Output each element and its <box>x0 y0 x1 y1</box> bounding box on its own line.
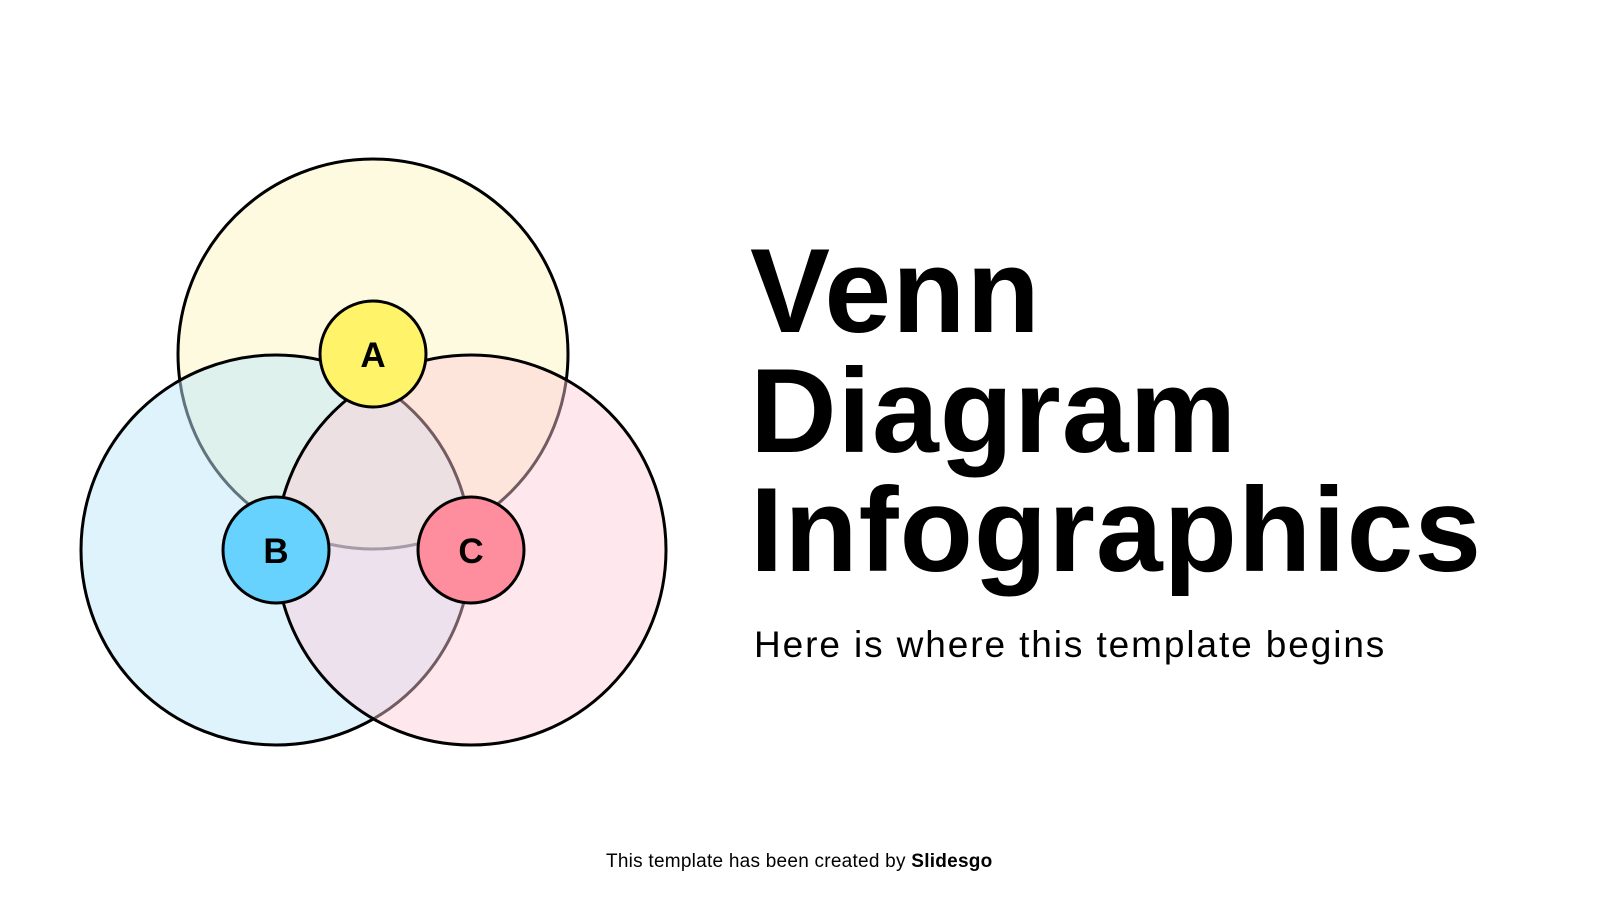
title: Venn <box>750 224 1041 358</box>
label C <box>418 497 524 603</box>
title <box>750 224 1482 597</box>
title: Diagram <box>750 344 1237 478</box>
label A <box>320 301 426 407</box>
label B <box>223 497 329 603</box>
title: Infographics <box>750 463 1482 597</box>
footer credit: This template has been created by Slidesgo <box>606 851 992 872</box>
circle C <box>276 355 666 745</box>
label B: B <box>263 532 289 571</box>
label C: C <box>458 532 484 571</box>
subtitle: Here is where this template begins <box>754 624 1386 665</box>
label A: A <box>360 336 386 375</box>
circle B <box>81 355 471 745</box>
circle A <box>178 159 568 549</box>
